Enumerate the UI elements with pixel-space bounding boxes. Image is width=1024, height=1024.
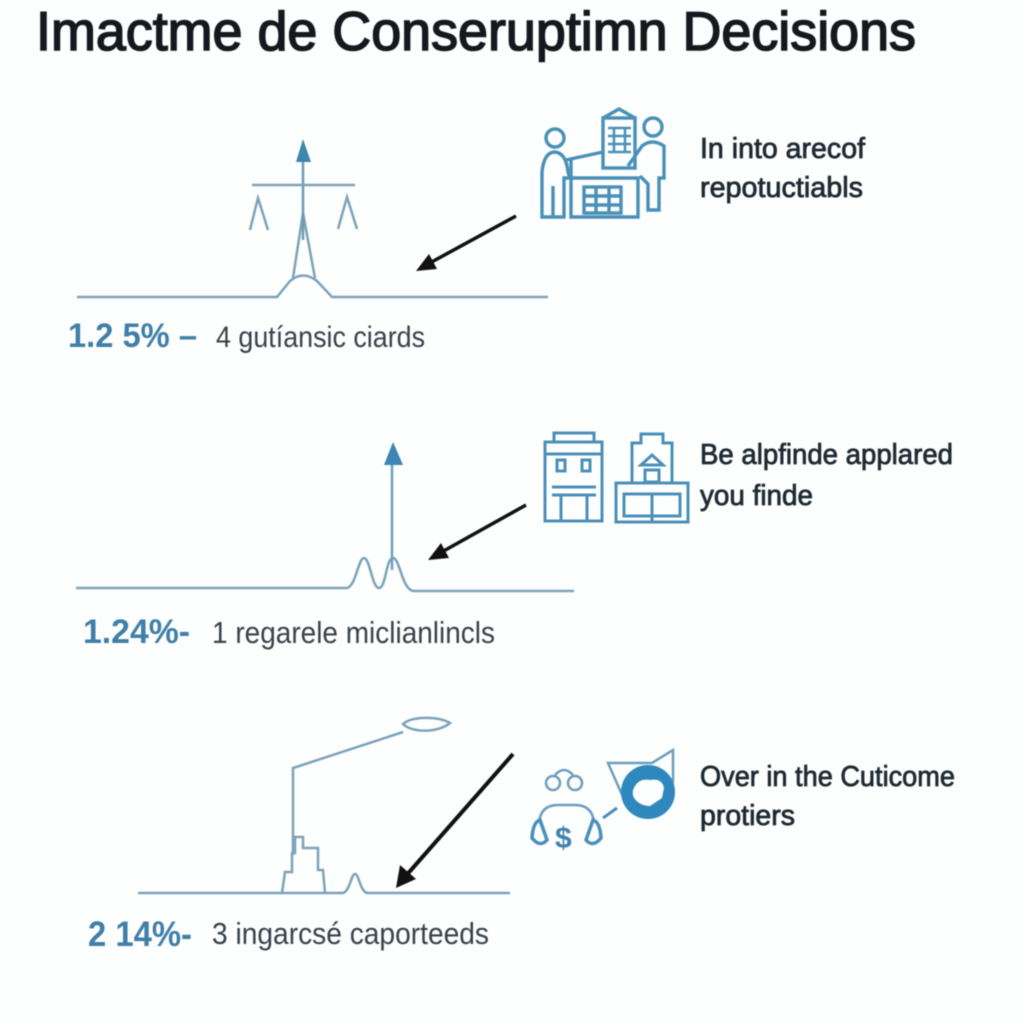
title: Imactme de Conseruptimn Decisions — [36, 0, 916, 62]
stat 2 — [83, 613, 495, 651]
stat 3: 3 ingarcsé caporteeds — [212, 916, 489, 951]
arrow 2 — [428, 505, 526, 560]
icon: buildings — [545, 433, 688, 522]
chart: peak with arrow 1 — [77, 139, 548, 297]
chart: peak with arrow 2 — [76, 442, 574, 591]
stat 3 — [88, 915, 489, 954]
pointer dash — [603, 808, 617, 818]
stat 3: 2 14%- — [88, 915, 192, 954]
label 3: protiers — [700, 800, 795, 832]
stat 1 — [68, 317, 425, 355]
icon: money and pie — [532, 750, 675, 855]
stat 1: 1.2 5% – — [68, 317, 197, 355]
label 3: Over in the Cuticome — [700, 761, 955, 793]
icon: money and pie: $ — [555, 822, 572, 855]
label 1: repotuctiabls — [700, 172, 863, 204]
arrow 3 — [396, 754, 513, 888]
label 2: Be alpfinde applared — [700, 439, 953, 471]
stat 1: 4 gutíansic ciards — [216, 321, 425, 354]
label 2: you finde — [700, 480, 813, 512]
ring — [621, 765, 675, 819]
stat 2: 1.24%- — [83, 613, 190, 651]
panel: section 3 — [88, 718, 963, 954]
icon: people and building — [542, 109, 664, 217]
chart: lamp and peak — [138, 718, 510, 893]
arrow 1 — [416, 216, 516, 271]
label 1: In into arecof — [700, 133, 866, 165]
panel: section 1 — [68, 109, 873, 355]
panel: section 2 — [76, 433, 961, 651]
stat 2: 1 regarele miclianlincls — [212, 615, 495, 650]
